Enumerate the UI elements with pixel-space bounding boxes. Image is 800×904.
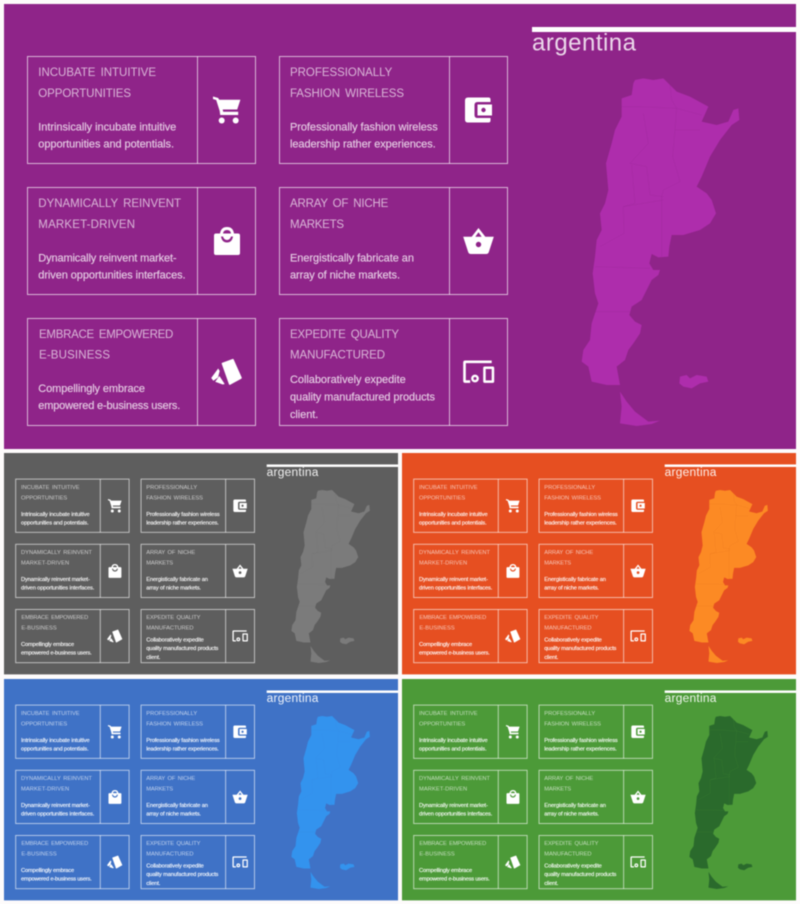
card heading: INCUBATE INTUITIVE <box>419 485 478 491</box>
card heading <box>544 776 593 792</box>
title: argentina <box>267 464 398 479</box>
card body: empowered e-business users. <box>21 650 92 656</box>
map of Argentina <box>689 490 768 663</box>
card body: Collaboratively expedite <box>290 374 406 386</box>
card body: Energistically fabricate an <box>146 803 208 809</box>
card heading: ARRAY OF NICHE <box>146 776 195 782</box>
card: dynamically reinvent market-driven <box>16 770 129 824</box>
card body <box>419 642 490 656</box>
icon: devices <box>232 856 248 868</box>
card: array of niche markets <box>141 770 254 824</box>
icon: price tags <box>107 630 122 643</box>
map of Argentina <box>689 716 768 889</box>
card body: opportunities and potentials. <box>21 520 89 526</box>
card heading <box>21 776 93 792</box>
card body: quality manufactured products <box>544 646 617 652</box>
card heading: EXPEDITE QUALITY <box>290 329 399 341</box>
card body: array of niche markets. <box>146 586 201 592</box>
card heading: INCUBATE INTUITIVE <box>21 485 80 491</box>
card body <box>146 864 219 887</box>
card heading: E-BUSINESS <box>419 625 455 631</box>
card: incubate intuitive opportunities <box>414 705 527 758</box>
card: expedite quality manufactured <box>141 835 254 889</box>
card body <box>419 512 488 526</box>
card heading: INCUBATE INTUITIVE <box>38 67 156 79</box>
card heading: ARRAY OF NICHE <box>290 198 389 210</box>
card body <box>419 868 490 882</box>
title: argentina: argentina <box>267 691 319 705</box>
card body: Collaboratively expedite <box>544 864 602 870</box>
card heading: INCUBATE INTUITIVE <box>419 711 478 717</box>
card body: Energistically fabricate an <box>544 803 606 809</box>
card heading: MARKET-DRIVEN <box>419 786 467 792</box>
card heading <box>290 198 389 231</box>
card: incubate intuitive opportunities <box>414 479 527 532</box>
card: array of niche markets <box>280 188 508 294</box>
card: incubate intuitive opportunities <box>16 705 129 758</box>
card heading: EXPEDITE QUALITY <box>146 615 201 621</box>
card: expedite quality manufactured <box>539 835 652 889</box>
card: expedite quality manufactured <box>280 318 508 426</box>
card heading: INCUBATE INTUITIVE <box>21 711 80 717</box>
card: embrace empowered e-business <box>414 609 527 663</box>
card heading: OPPORTUNITIES <box>419 721 465 727</box>
card heading <box>544 711 601 727</box>
card heading: MARKET-DRIVEN <box>21 786 69 792</box>
icon: basket <box>232 790 248 803</box>
card heading: FASHION WIRELESS <box>290 88 404 100</box>
card heading: EMBRACE EMPOWERED <box>21 841 88 847</box>
card heading <box>290 67 404 100</box>
card heading: EMBRACE EMPOWERED <box>39 329 173 341</box>
card heading <box>419 485 478 501</box>
card: array of niche markets <box>539 544 652 598</box>
icon: devices <box>463 360 494 383</box>
card body: quality manufactured products <box>544 872 617 878</box>
card: incubate intuitive opportunities <box>16 479 129 532</box>
card heading: MARKETS <box>290 219 344 231</box>
card body: empowered e-business users. <box>419 876 490 882</box>
card body <box>38 252 186 282</box>
card heading: EXPEDITE QUALITY <box>544 615 599 621</box>
card body: leadership rather experiences. <box>146 746 219 752</box>
card heading <box>146 485 203 501</box>
icon: price tags <box>211 359 242 385</box>
card heading: OPPORTUNITIES <box>419 495 465 501</box>
card heading <box>146 711 203 727</box>
title: argentina <box>665 464 796 479</box>
card heading: MARKET-DRIVEN <box>419 560 467 566</box>
card heading: ARRAY OF NICHE <box>544 550 593 556</box>
card body <box>544 638 617 661</box>
card heading: MARKET-DRIVEN <box>21 560 69 566</box>
card: array of niche markets <box>141 544 254 598</box>
icon: wallet <box>233 500 247 512</box>
card body <box>38 383 180 412</box>
card body <box>419 738 488 752</box>
card body: empowered e-business users. <box>21 876 92 882</box>
card body <box>21 577 95 592</box>
icon: wallet <box>631 500 645 512</box>
card body: Dynamically reinvent market- <box>21 577 90 583</box>
card body: array of niche markets. <box>544 812 599 818</box>
card body <box>290 374 436 421</box>
card body <box>146 512 220 526</box>
card heading: PROFESSIONALLY <box>146 485 197 491</box>
card body <box>419 803 493 818</box>
card body <box>419 577 493 592</box>
card body <box>290 252 414 282</box>
card body: Professionally fashion wireless <box>146 738 220 744</box>
map of Argentina <box>582 78 739 426</box>
icon: shopping bag <box>108 790 121 804</box>
icon: wallet <box>631 726 645 738</box>
card body: Intrinsically incubate intuitive <box>21 512 90 518</box>
card body: empowered e-business users. <box>38 400 180 412</box>
card heading: OPPORTUNITIES <box>21 721 67 727</box>
card: expedite quality manufactured <box>141 609 254 663</box>
card heading <box>146 776 195 792</box>
card body <box>544 512 618 526</box>
card body: driven opportunities interfaces. <box>21 812 95 818</box>
card body: Compellingly embrace <box>21 868 74 874</box>
card heading: EXPEDITE QUALITY <box>544 841 599 847</box>
card: dynamically reinvent market-driven <box>16 544 129 598</box>
icon: basket <box>630 564 646 577</box>
card body: client. <box>544 881 559 887</box>
card: array of niche markets <box>539 770 652 824</box>
card: incubate intuitive opportunities <box>28 56 256 164</box>
card body: opportunities and potentials. <box>419 520 487 526</box>
card: professionally fashion wireless <box>539 479 652 532</box>
card heading: DYNAMICALLY REINVENT <box>419 550 491 556</box>
card heading <box>38 198 181 231</box>
card heading: DYNAMICALLY REINVENT <box>21 776 93 782</box>
card heading <box>21 550 93 566</box>
card body <box>21 642 92 656</box>
card heading: MANUFACTURED <box>146 625 194 631</box>
card heading: DYNAMICALLY REINVENT <box>38 198 181 210</box>
card body: opportunities and potentials. <box>21 746 89 752</box>
card heading: FASHION WIRELESS <box>146 721 203 727</box>
card heading <box>21 841 88 857</box>
card body: Compellingly embrace <box>419 642 472 648</box>
icon: basket <box>630 790 646 803</box>
card body: Intrinsically incubate intuitive <box>38 122 176 134</box>
card body <box>290 122 438 150</box>
card heading: E-BUSINESS <box>419 851 455 857</box>
card heading: FASHION WIRELESS <box>544 495 601 501</box>
panel: gray variant <box>4 453 398 674</box>
card: dynamically reinvent market-driven <box>28 188 256 294</box>
card body: Professionally fashion wireless <box>290 122 438 134</box>
card body: client. <box>146 881 161 887</box>
card body: Dynamically reinvent market- <box>419 803 488 809</box>
card heading: EMBRACE EMPOWERED <box>21 615 88 621</box>
panel: orange variant <box>402 453 796 674</box>
card heading: E-BUSINESS <box>21 625 57 631</box>
card body: Compellingly embrace <box>38 383 145 395</box>
card: dynamically reinvent market-driven <box>414 770 527 824</box>
card heading: MARKETS <box>146 786 173 792</box>
icon: shopping cart <box>108 725 122 738</box>
card heading <box>146 550 195 566</box>
card heading <box>419 550 491 566</box>
card: embrace empowered e-business <box>16 835 129 889</box>
card body <box>544 864 617 887</box>
card body: driven opportunities interfaces. <box>419 586 493 592</box>
card heading: FASHION WIRELESS <box>146 495 203 501</box>
card heading <box>21 485 80 501</box>
card heading <box>290 329 399 362</box>
card heading: ARRAY OF NICHE <box>146 550 195 556</box>
map of Argentina <box>291 490 370 663</box>
icon: basket <box>463 228 494 254</box>
card: expedite quality manufactured <box>539 609 652 663</box>
card body: client. <box>146 655 161 661</box>
card heading: PROFESSIONALLY <box>290 67 393 79</box>
card body: quality manufactured products <box>290 392 436 404</box>
card heading <box>21 711 80 727</box>
card body: Energistically fabricate an <box>290 252 414 264</box>
card: professionally fashion wireless <box>280 56 508 164</box>
card heading: PROFESSIONALLY <box>146 711 197 717</box>
card heading <box>544 485 601 501</box>
title: argentina: argentina <box>665 465 717 479</box>
card body: leadership rather experiences. <box>146 520 219 526</box>
icon: shopping bag <box>214 227 240 255</box>
card: professionally fashion wireless <box>141 479 254 532</box>
card body: driven opportunities interfaces. <box>419 812 493 818</box>
icon: shopping bag <box>506 790 519 804</box>
card heading: MANUFACTURED <box>544 625 592 631</box>
card heading: E-BUSINESS <box>39 350 110 362</box>
card body <box>21 738 90 752</box>
icon: devices <box>630 856 646 868</box>
card body: driven opportunities interfaces. <box>21 586 95 592</box>
card body: array of niche markets. <box>290 270 400 282</box>
icon: shopping cart <box>506 725 520 738</box>
card body: Dynamically reinvent market- <box>21 803 90 809</box>
card heading <box>419 615 486 631</box>
card heading: ARRAY OF NICHE <box>544 776 593 782</box>
card heading <box>544 841 599 857</box>
icon: shopping cart <box>108 499 122 512</box>
card heading: MANUFACTURED <box>544 851 592 857</box>
card body: Intrinsically incubate intuitive <box>419 738 488 744</box>
card heading: OPPORTUNITIES <box>38 88 131 100</box>
card heading: PROFESSIONALLY <box>544 485 595 491</box>
card heading <box>39 329 173 362</box>
title: argentina <box>665 690 796 705</box>
icon: shopping bag <box>108 564 121 578</box>
card heading <box>544 615 599 631</box>
icon: wallet <box>233 726 247 738</box>
card body <box>146 738 220 752</box>
card body: array of niche markets. <box>146 812 201 818</box>
card heading: EMBRACE EMPOWERED <box>419 841 486 847</box>
icon: shopping bag <box>506 564 519 578</box>
card heading <box>146 615 201 631</box>
card body: Compellingly embrace <box>21 642 74 648</box>
card heading: MARKET-DRIVEN <box>38 219 135 231</box>
card body: Professionally fashion wireless <box>146 512 220 518</box>
card: embrace empowered e-business <box>28 318 256 426</box>
card body: leadership rather experiences. <box>544 520 617 526</box>
title: argentina <box>267 690 398 705</box>
card heading: FASHION WIRELESS <box>544 721 601 727</box>
title: argentina: argentina <box>532 30 637 56</box>
card body <box>146 577 208 592</box>
card body <box>146 803 208 818</box>
card body: Professionally fashion wireless <box>544 512 618 518</box>
card heading: MARKETS <box>146 560 173 566</box>
card body: quality manufactured products <box>146 872 219 878</box>
panel: purple main <box>4 4 796 449</box>
card body: empowered e-business users. <box>419 650 490 656</box>
card heading: DYNAMICALLY REINVENT <box>21 550 93 556</box>
card body <box>21 512 90 526</box>
card body: Collaboratively expedite <box>146 864 204 870</box>
card body <box>544 577 606 592</box>
card: embrace empowered e-business <box>16 609 129 663</box>
icon: devices <box>232 630 248 642</box>
card body: Dynamically reinvent market- <box>38 252 177 264</box>
card heading <box>544 550 593 566</box>
card heading: E-BUSINESS <box>21 851 57 857</box>
card body: Professionally fashion wireless <box>544 738 618 744</box>
card body <box>21 868 92 882</box>
card body: quality manufactured products <box>146 646 219 652</box>
card heading: MARKETS <box>544 786 571 792</box>
card body: driven opportunities interfaces. <box>38 270 186 282</box>
card heading: OPPORTUNITIES <box>21 495 67 501</box>
card body: Dynamically reinvent market- <box>419 577 488 583</box>
icon: price tags <box>505 630 520 643</box>
icon: basket <box>232 564 248 577</box>
card heading <box>146 841 201 857</box>
title: argentina: argentina <box>267 465 319 479</box>
panel: blue variant <box>4 679 398 900</box>
card heading <box>419 776 491 792</box>
title: argentina <box>532 27 796 56</box>
card body <box>146 638 219 661</box>
card body: Compellingly embrace <box>419 868 472 874</box>
card body: Energistically fabricate an <box>544 577 606 583</box>
card body: Intrinsically incubate intuitive <box>21 738 90 744</box>
card heading: DYNAMICALLY REINVENT <box>419 776 491 782</box>
card body <box>544 738 618 752</box>
card heading: MANUFACTURED <box>290 350 385 362</box>
icon: devices <box>630 630 646 642</box>
card body: Intrinsically incubate intuitive <box>419 512 488 518</box>
card: professionally fashion wireless <box>141 705 254 758</box>
card body: client. <box>290 409 318 421</box>
card: dynamically reinvent market-driven <box>414 544 527 598</box>
card heading: MARKETS <box>544 560 571 566</box>
card body: opportunities and potentials. <box>38 138 174 150</box>
card body: array of niche markets. <box>544 586 599 592</box>
card heading: MANUFACTURED <box>146 851 194 857</box>
card heading: EMBRACE EMPOWERED <box>419 615 486 621</box>
card body: Collaboratively expedite <box>544 638 602 644</box>
icon: shopping cart <box>506 499 520 512</box>
card body: leadership rather experiences. <box>290 138 436 150</box>
card body: opportunities and potentials. <box>419 746 487 752</box>
card heading <box>419 711 478 727</box>
card heading <box>419 841 486 857</box>
icon: wallet <box>465 98 492 122</box>
card body <box>21 803 95 818</box>
card: embrace empowered e-business <box>414 835 527 889</box>
card body: Energistically fabricate an <box>146 577 208 583</box>
card: professionally fashion wireless <box>539 705 652 758</box>
card heading <box>21 615 88 631</box>
title: argentina: argentina <box>665 691 717 705</box>
card heading: PROFESSIONALLY <box>544 711 595 717</box>
icon: shopping cart <box>213 96 240 124</box>
icon: price tags <box>107 856 122 869</box>
card heading <box>38 67 156 100</box>
panel: green variant <box>402 679 796 900</box>
card body <box>544 803 606 818</box>
card body: leadership rather experiences. <box>544 746 617 752</box>
card body <box>38 122 176 150</box>
card body: Collaboratively expedite <box>146 638 204 644</box>
card heading: EXPEDITE QUALITY <box>146 841 201 847</box>
map of Argentina <box>291 716 370 889</box>
icon: price tags <box>505 856 520 869</box>
card body: client. <box>544 655 559 661</box>
